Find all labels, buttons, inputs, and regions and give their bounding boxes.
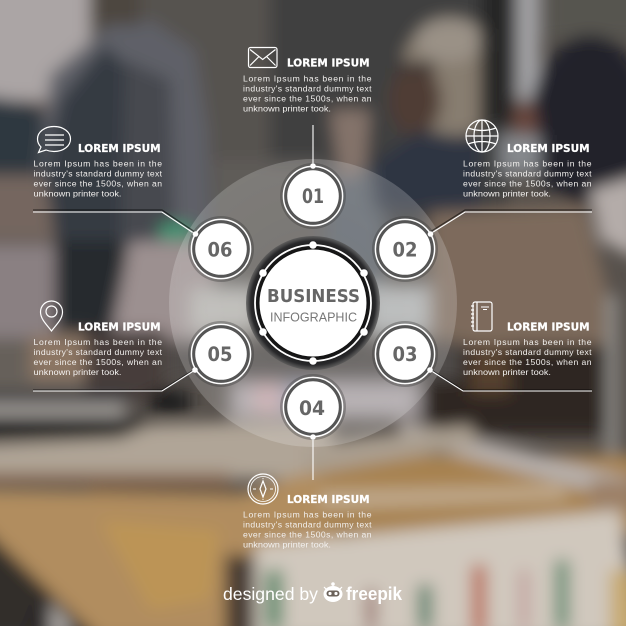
attribution: designed by freepik: freepik [346,584,403,604]
node 03 [372,321,438,387]
text block 03: unknown printer took. [463,367,551,377]
wood [0,460,340,626]
node 03: 03 [392,343,418,366]
icon: compass [248,474,278,504]
text block 04: LOREM IPSUM [287,494,370,506]
node 02 [372,216,438,282]
node 05 [188,321,254,387]
left desk [0,338,110,398]
text block 05: ever since the 1500s, when an [34,357,162,367]
text block 02: ever since the 1500s, when an [463,178,592,188]
text block 06: industry's standard dummy text [34,168,163,178]
right person [400,18,500,138]
text block 04: industry's standard dummy text [243,520,372,530]
text block 02: industry's standard dummy text [463,168,592,178]
node 04: 04 [299,397,325,420]
text block 01: ever since the 1500s, when an [243,94,372,104]
node 02: 02 [392,238,418,262]
text block 03: industry's standard dummy text [463,347,592,357]
center reflection [170,340,460,380]
text block 04: Lorem Ipsum has been in the [243,510,372,520]
text block 01: industry's standard dummy text [243,84,372,94]
text block 05 [34,322,163,377]
text block 05: unknown printer took. [34,367,122,377]
text block 06: Lorem Ipsum has been in the [34,158,162,168]
attribution: designed by freepik [223,582,403,604]
text block 04: ever since the 1500s, when an [243,530,372,540]
text block 02 [463,143,592,198]
icon: location pin [40,301,62,331]
text block 01 [243,58,372,114]
text block 04: unknown printer took. [243,540,331,550]
node 01 [280,163,346,229]
text block 02: unknown printer took. [463,188,551,198]
translucent main circle [169,159,457,447]
hub subtitle: INFOGRAPHIC [270,310,357,324]
icon: freepik mascot [324,582,342,602]
text block 06: ever since the 1500s, when an [34,178,162,188]
text block 06 [34,143,163,198]
text block 02: LOREM IPSUM [507,143,590,155]
icon: envelope [248,48,277,68]
text block 03: Lorem Ipsum has been in the [463,337,592,347]
text block 05: industry's standard dummy text [34,347,163,357]
text block 05: Lorem Ipsum has been in the [34,337,162,347]
center hub [246,236,380,370]
text block 01: Lorem Ipsum has been in the [243,74,372,84]
text block 03: ever since the 1500s, when an [463,357,592,367]
text block 03 [463,322,592,377]
node 01: 01 [302,185,324,208]
text block 06: LOREM IPSUM [78,143,160,155]
node 05: 05 [208,343,232,366]
text block 02: Lorem Ipsum has been in the [463,158,592,168]
text block 01: LOREM IPSUM [287,58,370,70]
node 06: 06 [208,238,232,262]
hub title: BUSINESS [267,287,360,307]
icon: globe [466,120,498,152]
node 06 [188,216,254,282]
text block 01: unknown printer took. [243,104,331,114]
icon: speech bubble [38,126,70,152]
node 04 [280,374,346,440]
connector lines [33,125,592,480]
text block 06: unknown printer took. [34,188,122,198]
files [225,555,265,626]
text block 03: LOREM IPSUM [507,322,590,334]
text block 04 [243,494,372,550]
text block 05: LOREM IPSUM [78,322,160,334]
icon: notebook [471,302,492,331]
attribution: designed by freepik: designed by [223,584,318,604]
